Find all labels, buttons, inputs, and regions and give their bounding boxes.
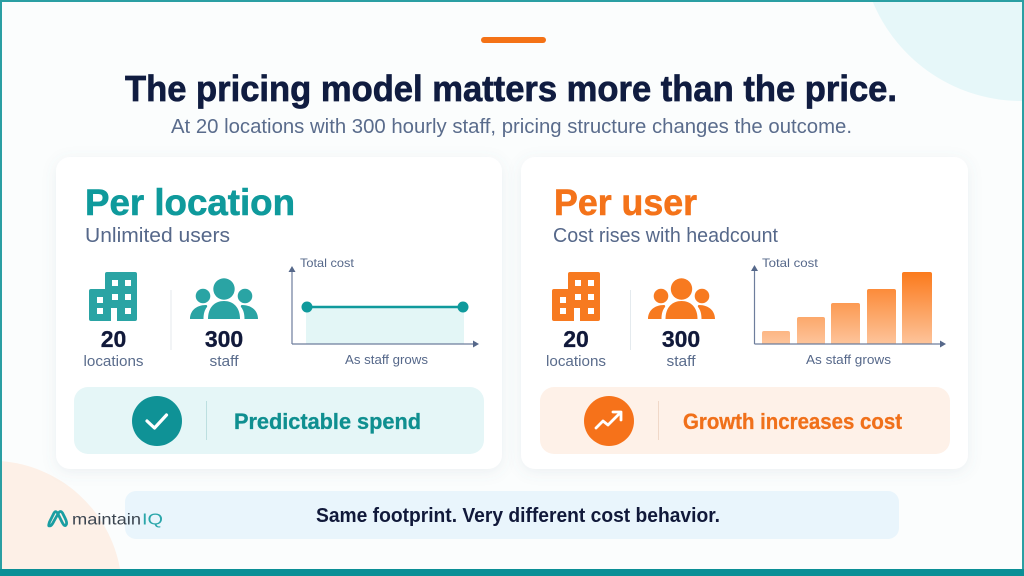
- chart: flat total cost: As staff grows: [345, 353, 428, 367]
- panel: per user: [521, 157, 968, 469]
- stat: 20 locations: 20: [563, 326, 589, 352]
- icon: people: [190, 278, 258, 319]
- callout: predictable spend: [74, 387, 484, 454]
- logo: maintainIQ: [49, 512, 163, 528]
- chart: flat total cost: Total cost: [300, 256, 355, 270]
- stat: 300 staff: staff: [210, 353, 239, 370]
- stat: 300 staff: 300: [662, 326, 700, 352]
- stat: 300 staff: [205, 326, 243, 370]
- callout: growth increases cost: Growth increases cost: [683, 409, 903, 434]
- subheading: cost rises with headcount: Cost rises with headcount: [553, 225, 778, 247]
- heading: per user: Per user: [554, 182, 697, 223]
- logo: maintainIQ: IQ: [142, 512, 163, 528]
- stat: 20 locations: [84, 326, 144, 370]
- bottom bar: [0, 569, 1024, 576]
- callout: predictable spend: Predictable spend: [234, 409, 421, 434]
- heading: per location: Per location: [85, 182, 295, 223]
- takeaway banner: [125, 491, 899, 539]
- stat: 20 locations: locations: [546, 353, 606, 370]
- title: The pricing model matters more than the price.: [125, 68, 897, 109]
- icon: building: [552, 272, 600, 321]
- stat: 300 staff: [662, 326, 700, 370]
- stat: 20 locations: locations: [84, 353, 144, 370]
- subtitle: At 20 locations with 300 hourly staff, pricing structure changes the outcome.: [171, 116, 852, 138]
- logo: maintainIQ: maintain: [72, 512, 141, 528]
- chart: rising total cost: Total cost: [762, 256, 819, 270]
- panel: per location: [56, 157, 502, 469]
- stat: 300 staff: 300: [205, 326, 243, 352]
- decorative corner: top right: [872, 0, 1024, 101]
- takeaway banner: Same footprint. Very different cost behavior.: [316, 505, 720, 527]
- decorative corner: bottom left: [0, 461, 120, 569]
- icon: people: [648, 278, 715, 319]
- chart: rising total cost: As staff grows: [806, 353, 891, 367]
- orange accent bar: [481, 37, 546, 43]
- stat: 300 staff: staff: [666, 353, 696, 370]
- icon: building: [89, 272, 137, 321]
- chart: rising total cost: [751, 256, 946, 367]
- stat: 20 locations: 20: [101, 326, 126, 352]
- subheading: unlimited users: Unlimited users: [85, 225, 230, 247]
- chart: flat total cost: [288, 256, 479, 367]
- callout: growth increases cost: [540, 387, 950, 454]
- stat: 20 locations: [546, 326, 606, 370]
